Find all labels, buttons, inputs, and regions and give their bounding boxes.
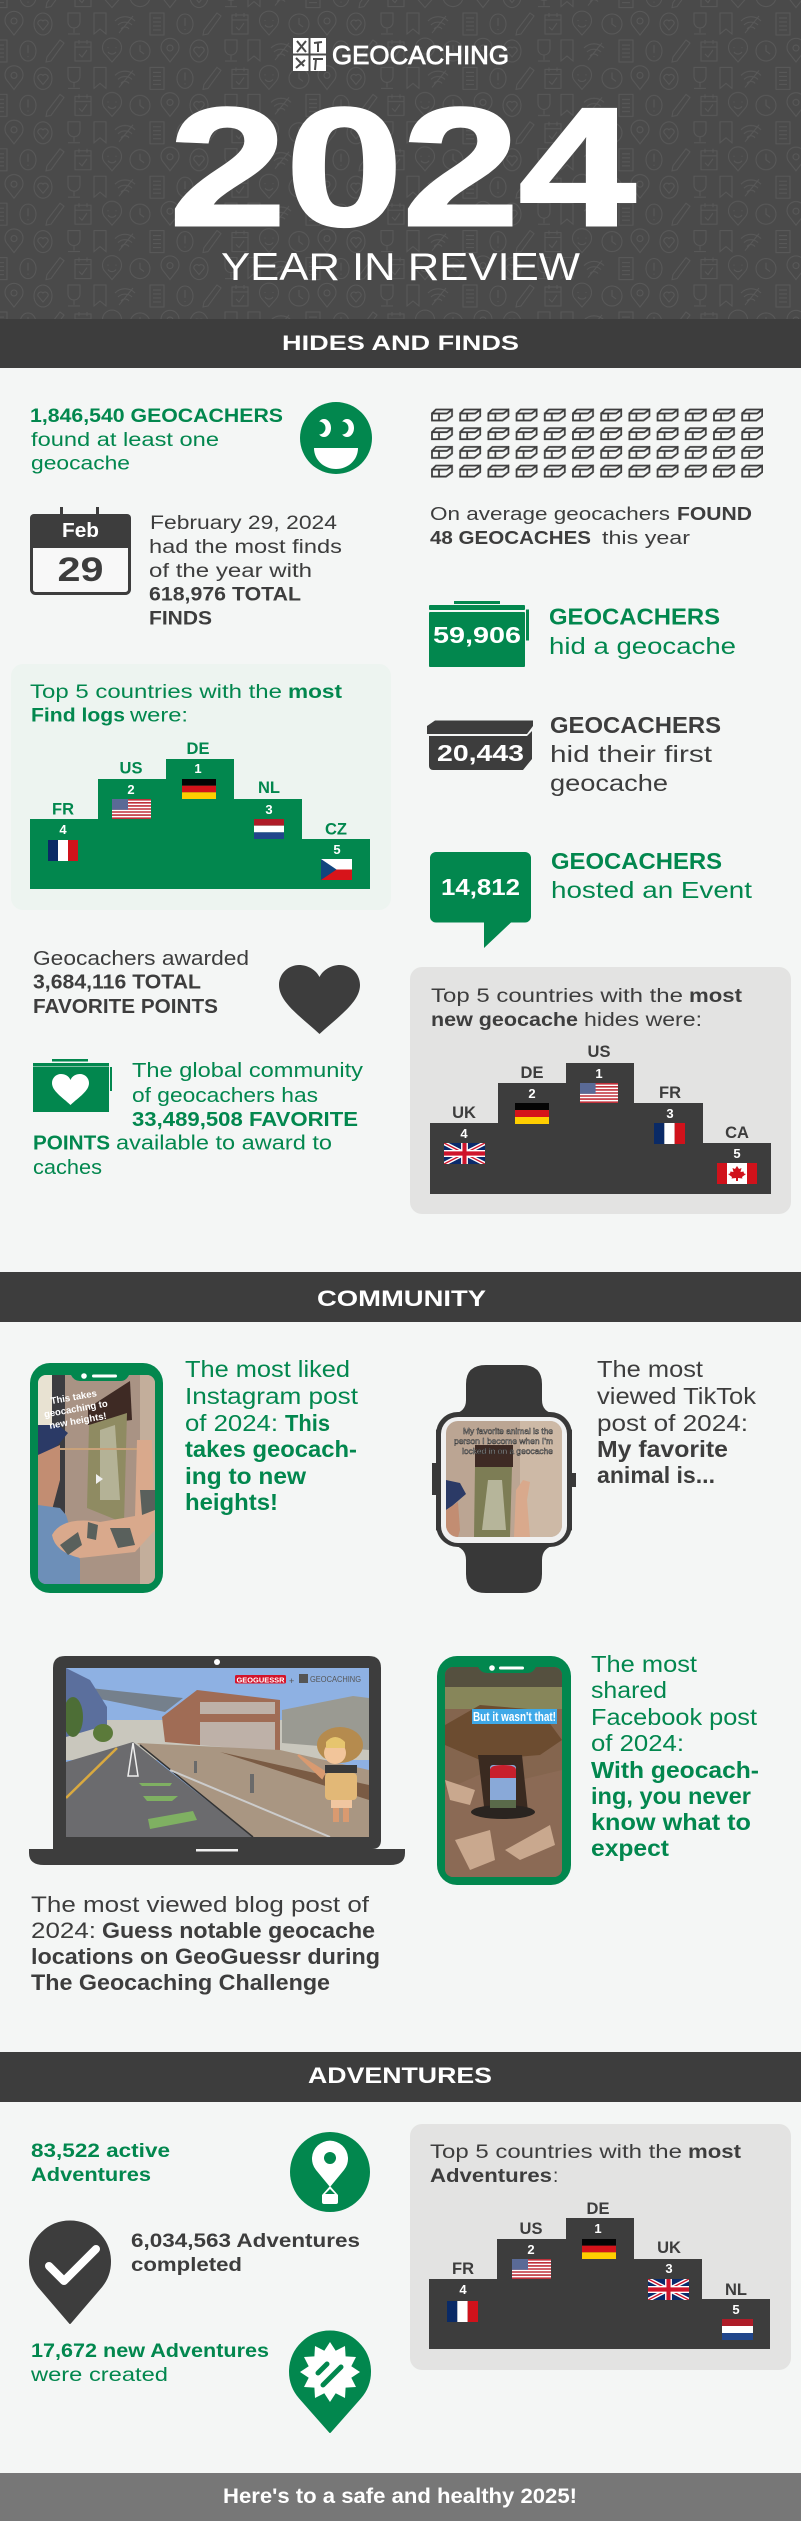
footer band xyxy=(0,2473,801,2521)
text: most shared Facebook post: ing, you never xyxy=(591,1783,751,1809)
stat: hosted an event xyxy=(551,848,753,903)
podium chart: 1 xyxy=(594,2221,602,2236)
stat: adventures completed: 6,034,563 Adventures xyxy=(131,2230,360,2252)
panel heading xyxy=(30,682,343,726)
section band: adventures: ADVENTURES xyxy=(308,2063,492,2088)
stat: hosted an event: hosted an Event xyxy=(551,877,753,903)
footer band: Here's to a safe and healthy 2025! xyxy=(223,2485,577,2508)
podium chart: US xyxy=(120,760,142,778)
flag: United States xyxy=(112,799,151,819)
facebook photo: But it wasn't that! xyxy=(473,1709,556,1724)
text: most viewed blog post: locations on GeoGuessr during xyxy=(31,1944,380,1969)
title: 2024: 2024 xyxy=(170,73,636,261)
text: most shared Facebook post: Facebook post xyxy=(591,1704,758,1730)
podium chart: UK xyxy=(452,1104,476,1122)
stat: favorite points awarded: FAVORITE POINTS xyxy=(33,996,218,1018)
stat: hosted an event: GEOCACHERS xyxy=(551,848,722,874)
text: most liked Instagram post: heights! xyxy=(185,1489,278,1515)
stat: available favorite points: The global community xyxy=(132,1060,363,1082)
podium chart: 5 xyxy=(732,2302,740,2317)
flag: Netherlands xyxy=(254,819,284,839)
podium chart: NL xyxy=(258,779,280,797)
podium chart: 1 xyxy=(194,761,202,776)
icon: dark ammo can 20,443: 20,443 xyxy=(437,740,524,766)
stat: favorite points awarded xyxy=(33,948,249,1018)
icon: speech bubble 14,812: 14,812 xyxy=(441,874,520,900)
podium chart: UK xyxy=(657,2239,681,2257)
podium chart: DE xyxy=(521,1064,543,1082)
text: most viewed blog post: Guess notable geocache xyxy=(102,1918,375,1943)
podium chart: DE xyxy=(187,740,209,758)
podium chart: CA xyxy=(725,1124,749,1142)
text: most viewed blog post xyxy=(31,1892,380,1995)
stat: geocachers found: found at least one xyxy=(31,430,219,451)
text: most viewed TikTok post: post of 2024: xyxy=(597,1410,748,1436)
stat: available favorite points: caches xyxy=(33,1157,102,1179)
podium chart xyxy=(429,2200,770,2349)
icon grid: 48 geocaches xyxy=(431,408,763,480)
blog photo: + xyxy=(289,1676,294,1686)
panel heading: were: xyxy=(129,706,188,726)
stat: active adventures: 83,522 active xyxy=(31,2140,170,2162)
podium chart: US xyxy=(520,2220,542,2238)
stat: most finds day: had the most finds xyxy=(149,537,342,558)
stat: hid first geocache: geocache xyxy=(550,770,668,796)
text: most viewed TikTok post: animal is... xyxy=(597,1462,715,1488)
stat: hid first geocache xyxy=(550,712,721,796)
blog photo: GEOGUESSR xyxy=(236,1676,285,1684)
phone: Facebook post xyxy=(437,1656,571,1885)
podium chart: 4 xyxy=(460,1126,468,1141)
panel heading: most xyxy=(689,986,743,1007)
instagram photo: geocaching to xyxy=(43,1398,109,1421)
blog photo: GEOCACHING xyxy=(310,1675,361,1684)
panel heading xyxy=(430,2142,742,2187)
podium chart: 3 xyxy=(265,802,273,817)
icon: ammo can with heart xyxy=(33,1059,112,1112)
stat: new adventures xyxy=(30,2340,269,2386)
stat: geocachers found: geocache xyxy=(31,454,130,474)
icon: new adventure pin xyxy=(290,2332,370,2432)
panel heading xyxy=(431,986,743,1031)
podium chart: FR xyxy=(452,2260,474,2278)
flag: United States xyxy=(580,1083,618,1103)
stat: most finds day: of the year with xyxy=(149,561,312,582)
stat: favorite points awarded: 3,684,116 TOTAL xyxy=(33,972,201,994)
stat: available favorite points: available to award to xyxy=(116,1132,332,1154)
phone: Instagram post xyxy=(30,1363,163,1593)
stat: average finds: 48 GEOCACHES xyxy=(430,528,591,548)
podium chart xyxy=(30,740,370,889)
text: most viewed blog post: 2024: xyxy=(31,1918,96,1943)
section band: community: COMMUNITY xyxy=(317,1286,486,1311)
podium chart: 3 xyxy=(665,2261,673,2276)
text: most shared Facebook post: shared xyxy=(591,1677,667,1703)
stat: new adventures: were created xyxy=(30,2364,168,2386)
flag: France xyxy=(48,840,78,861)
icon: calendar: Feb xyxy=(62,520,99,542)
section band: community xyxy=(0,1272,801,1322)
panel: top countries new hides xyxy=(410,967,791,1214)
stat: average finds: On average geocachers xyxy=(430,504,670,524)
icon: green ammo can 59,906 xyxy=(429,601,529,667)
subtitle: year in review: YEAR IN REVIEW xyxy=(221,246,580,289)
panel heading: new geocache xyxy=(431,1010,578,1031)
podium chart xyxy=(430,1043,771,1194)
panel heading: Find logs xyxy=(31,706,125,726)
panel heading: most xyxy=(288,682,343,703)
stat: active adventures xyxy=(31,2140,170,2186)
flag: Germany xyxy=(515,1103,549,1124)
text: most viewed blog post: The Geocaching Challenge xyxy=(31,1970,330,1995)
podium chart: DE xyxy=(587,2200,609,2218)
icon: calendar: 29 xyxy=(58,551,104,589)
stat: average finds: FOUND xyxy=(677,504,752,524)
text: most liked Instagram post: ing to new xyxy=(185,1463,306,1489)
panel heading: Top 5 countries with the xyxy=(430,2142,682,2163)
stat: adventures completed: completed xyxy=(131,2254,242,2276)
section band: hides and finds xyxy=(0,319,801,368)
text: most shared Facebook post: With geocach- xyxy=(591,1757,759,1783)
panel heading: Adventures xyxy=(430,2166,552,2187)
instagram photo: This takes xyxy=(50,1388,98,1407)
panel: top countries find logs xyxy=(11,664,391,910)
text: most viewed TikTok post: My favorite xyxy=(597,1436,728,1462)
podium chart: 3 xyxy=(666,1106,674,1121)
flag: Germany xyxy=(182,779,216,799)
panel heading: : xyxy=(553,2166,558,2187)
text: most liked Instagram post: takes geocach- xyxy=(185,1436,357,1462)
podium chart: FR xyxy=(52,800,74,818)
header panel xyxy=(0,0,801,319)
text: most liked Instagram post: The most liked xyxy=(185,1356,350,1382)
stat: available favorite points xyxy=(33,1060,363,1179)
podium chart: 5 xyxy=(333,842,341,857)
stat: hid first geocache: GEOCACHERS xyxy=(550,712,721,738)
flag: Netherlands xyxy=(722,2319,753,2340)
tiktok photo: locked in on a geocache xyxy=(462,1446,553,1456)
panel heading: hides were: xyxy=(584,1010,702,1031)
podium chart: 5 xyxy=(733,1146,741,1161)
icon: green ammo can 59,906: 59,906 xyxy=(433,622,521,648)
text: most shared Facebook post: know what to xyxy=(591,1809,751,1835)
stat: hid a geocache: hid a geocache xyxy=(549,633,736,659)
flag: France xyxy=(447,2301,478,2322)
podium chart: FR xyxy=(659,1084,681,1102)
tiktok photo: My favorite animal is the xyxy=(463,1426,553,1436)
flag: United States xyxy=(512,2259,551,2279)
tiktok photo: person I become when I'm xyxy=(454,1436,553,1446)
podium chart: 4 xyxy=(459,2282,467,2297)
blog photo xyxy=(63,1668,369,1837)
text: most viewed TikTok post xyxy=(597,1356,757,1488)
laptop: blog post xyxy=(29,1656,405,1865)
instagram photo xyxy=(38,1375,155,1584)
text: most liked Instagram post xyxy=(185,1356,359,1515)
text: most shared Facebook post xyxy=(591,1651,759,1861)
stat: available favorite points: 33,489,508 FAVORITE xyxy=(132,1109,358,1131)
stat: most finds day: 618,976 TOTAL xyxy=(149,584,301,606)
stat: most finds day: FINDS xyxy=(149,608,212,630)
stat: new adventures: 17,672 new Adventures xyxy=(31,2340,269,2362)
text: most viewed blog post: The most viewed blog post of xyxy=(31,1892,370,1917)
panel heading: Top 5 countries with the xyxy=(431,986,683,1007)
stat: active adventures: Adventures xyxy=(31,2164,151,2186)
icon: dark ammo can 20,443 xyxy=(427,720,533,770)
panel: top countries adventures xyxy=(410,2124,791,2370)
text: most viewed TikTok post: The most xyxy=(597,1356,704,1382)
podium chart: 2 xyxy=(527,2242,535,2257)
text: most shared Facebook post: of 2024: xyxy=(591,1730,684,1756)
panel heading: most xyxy=(688,2142,742,2163)
flag: France xyxy=(654,1123,685,1144)
flag: Czechia xyxy=(321,859,352,880)
icon: smiley xyxy=(300,402,372,474)
text: most shared Facebook post: expect xyxy=(591,1835,669,1861)
stat: hid first geocache: hid their first xyxy=(550,741,713,767)
icon: dark heart xyxy=(279,965,360,1034)
stat: available favorite points: of geocachers has xyxy=(132,1085,318,1107)
stat: favorite points awarded: Geocachers awarded xyxy=(33,948,249,970)
podium chart: NL xyxy=(725,2281,747,2299)
stat: available favorite points: POINTS xyxy=(33,1132,110,1154)
icon: adventure pin in circle xyxy=(290,2132,370,2212)
podium chart: 2 xyxy=(528,1086,536,1101)
icon: speech bubble 14,812 xyxy=(430,852,531,948)
text: most shared Facebook post: The most xyxy=(591,1651,698,1677)
flag: Canada xyxy=(717,1163,757,1184)
stat: hid a geocache xyxy=(549,604,736,659)
stat: geocachers found xyxy=(30,406,283,474)
flag: United Kingdom xyxy=(444,1143,485,1164)
instagram photo: new heights! xyxy=(48,1411,108,1432)
podium chart: 4 xyxy=(59,822,67,837)
icon: check pin xyxy=(30,2222,110,2323)
podium chart: 2 xyxy=(127,782,135,797)
text: most liked Instagram post: This xyxy=(285,1410,330,1436)
text: most liked Instagram post: of 2024: xyxy=(185,1410,278,1436)
section band: hides and finds: HIDES AND FINDS xyxy=(282,332,519,355)
podium chart: CZ xyxy=(325,820,347,838)
stat: average finds: this year xyxy=(602,528,690,548)
facebook photo xyxy=(445,1667,562,1877)
stat: hid a geocache: GEOCACHERS xyxy=(549,604,720,630)
stat: adventures completed xyxy=(131,2230,360,2276)
watch: TikTok post xyxy=(432,1365,576,1593)
icon: calendar xyxy=(30,507,131,594)
stat: most finds day: February 29, 2024 xyxy=(150,513,338,534)
stat: most finds day xyxy=(149,513,342,630)
tiktok photo xyxy=(446,1421,562,1537)
flag: United Kingdom xyxy=(648,2279,689,2300)
stat: geocachers found: 1,846,540 GEOCACHERS xyxy=(30,406,283,427)
text: most liked Instagram post: Instagram post xyxy=(185,1383,359,1409)
podium chart: 1 xyxy=(595,1066,603,1081)
text: most viewed TikTok post: viewed TikTok xyxy=(597,1383,757,1409)
logo: Geocaching: GEOCACHING xyxy=(332,40,509,70)
panel heading: Top 5 countries with the xyxy=(30,682,282,703)
section band: adventures xyxy=(0,2052,801,2102)
stat: average finds xyxy=(430,504,752,548)
flag: Germany xyxy=(582,2239,616,2259)
podium chart: US xyxy=(588,1043,610,1061)
